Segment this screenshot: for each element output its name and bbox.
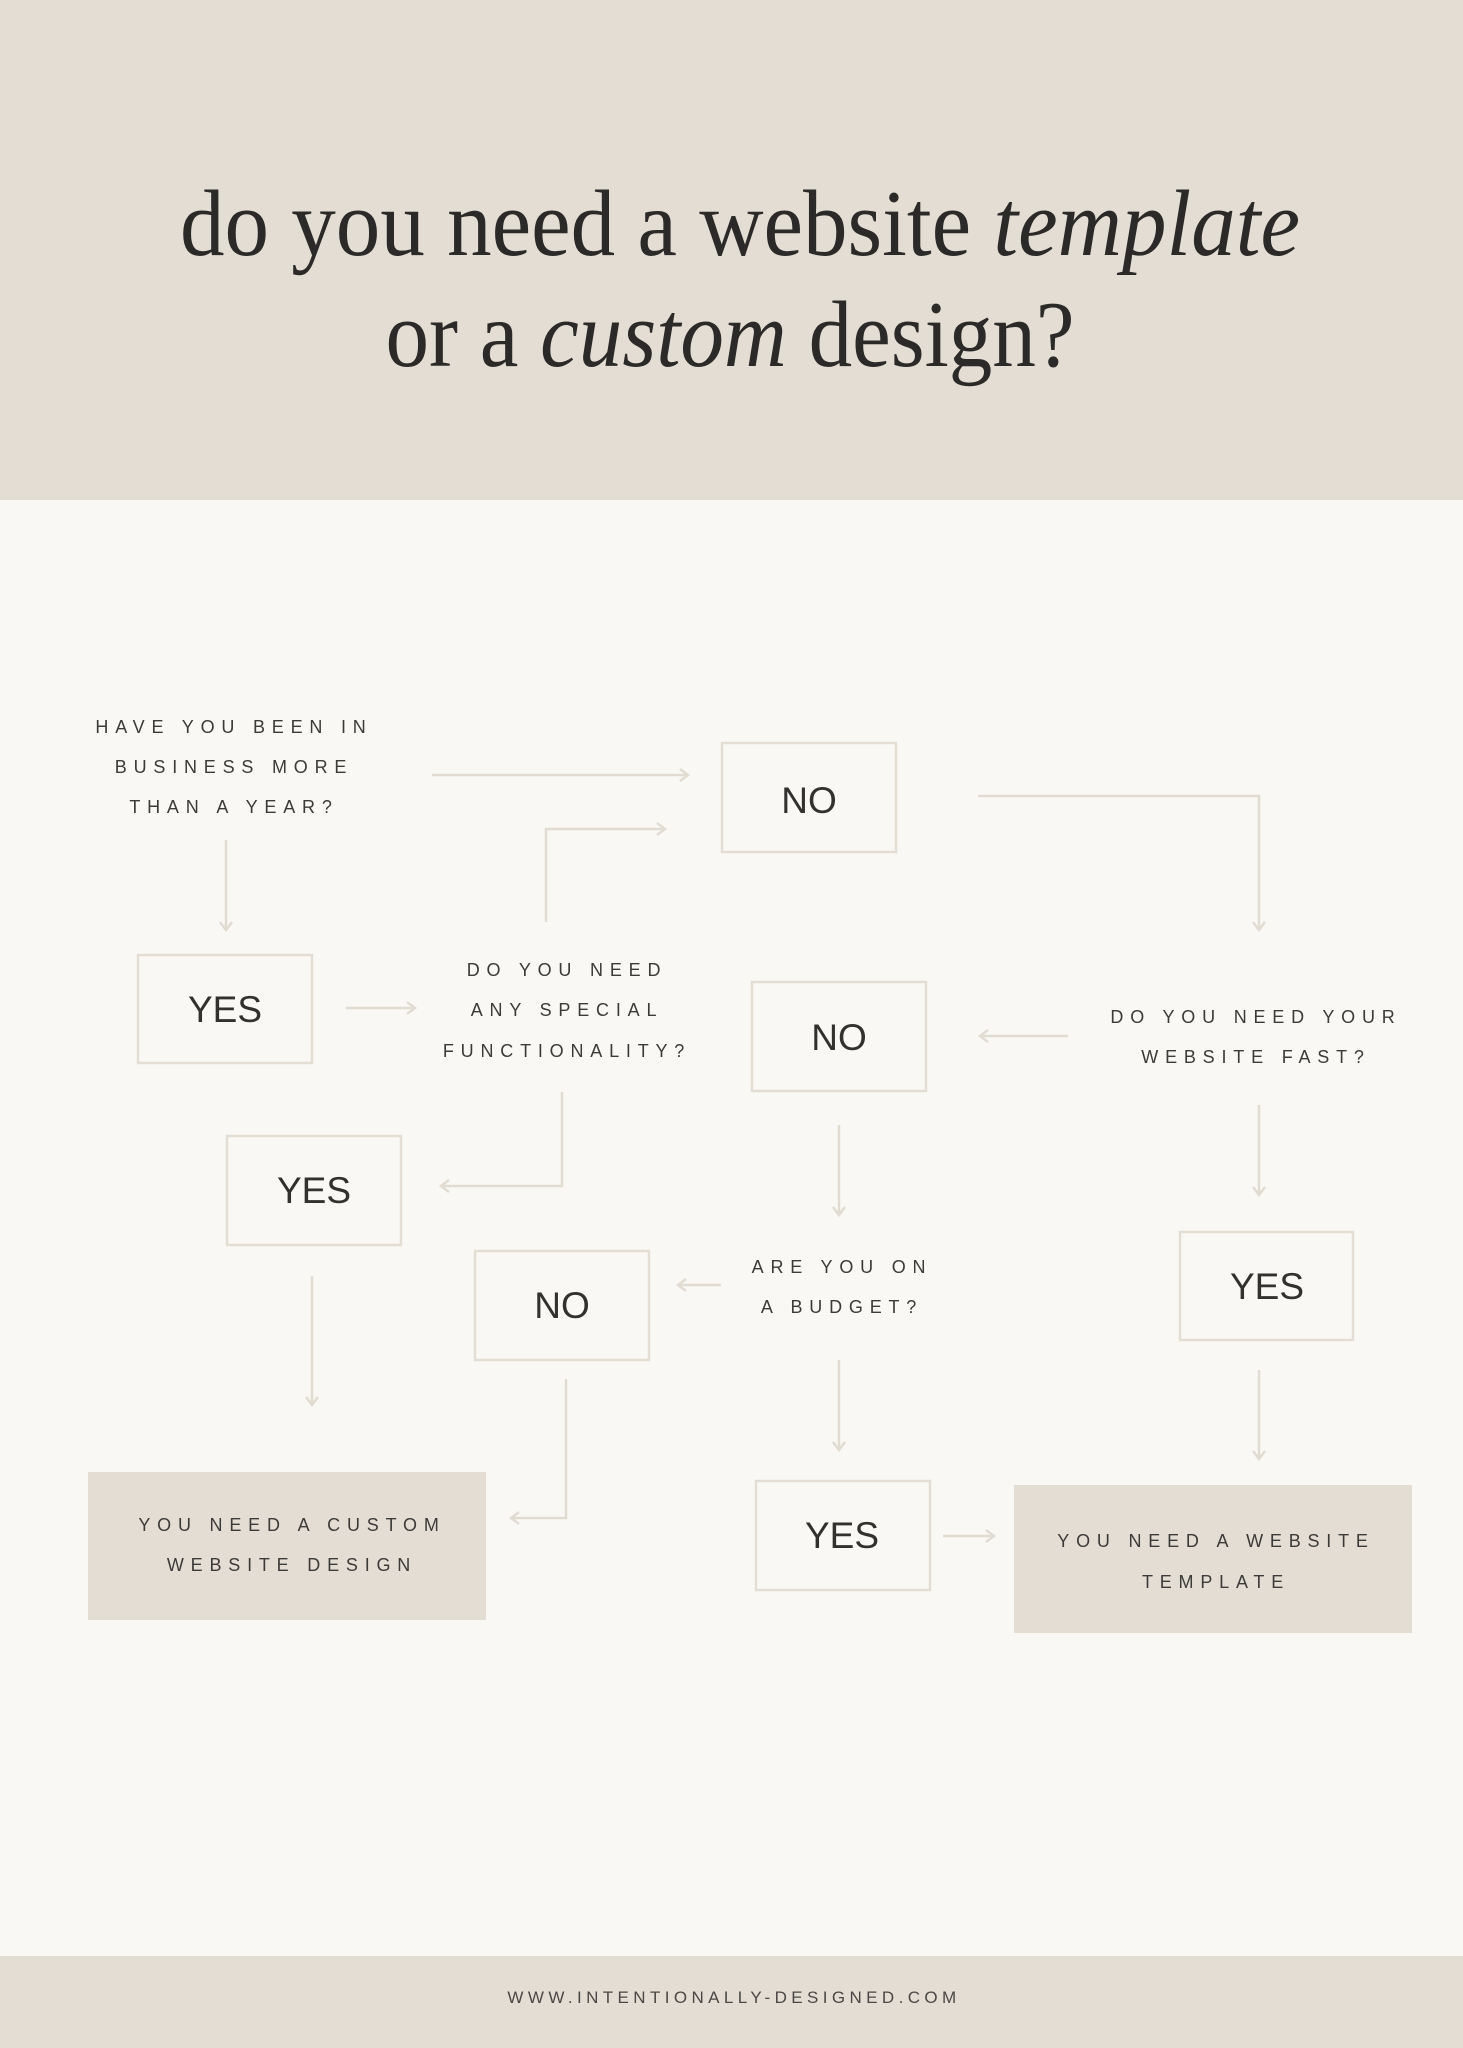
arrow: yes4 to template	[943, 1535, 994, 1537]
footer band	[0, 1956, 1463, 2048]
question: in business more than a year	[95, 717, 373, 817]
arrow: no2 down to budget	[838, 1125, 840, 1215]
box: yes 3: YES	[1230, 1266, 1304, 1307]
footer url: WWW.INTENTIONALLY-DESIGNED.COM	[507, 1988, 961, 2007]
title: do you need a website template	[180, 172, 1300, 276]
arrow: no1 to fast question	[978, 796, 1259, 930]
question: in business more than a year: HAVE YOU BEEN IN	[95, 717, 373, 737]
question: website fast	[1110, 1007, 1402, 1067]
box: no 3	[475, 1251, 649, 1360]
box: no 1: NO	[781, 780, 837, 821]
box: no 3: NO	[534, 1285, 590, 1326]
box: yes 3	[1180, 1232, 1353, 1340]
box: yes 1	[138, 955, 312, 1063]
header band	[0, 0, 1463, 500]
box: yes 2: YES	[277, 1170, 351, 1211]
question: special functionality: FUNCTIONALITY?	[443, 1041, 691, 1061]
question: special functionality	[443, 960, 691, 1061]
arrow: no3 to custom	[511, 1379, 566, 1518]
box: yes 4: YES	[805, 1515, 879, 1556]
box: no 1	[722, 743, 896, 852]
box: no 2: NO	[811, 1017, 867, 1058]
arrow: q2 down to yes2	[441, 1092, 562, 1186]
arrow: fast to no2	[980, 1035, 1068, 1037]
arrow: q1 down to yes	[225, 840, 227, 930]
question: special functionality: ANY SPECIAL	[471, 1000, 663, 1020]
arrow: yes1 to q2	[346, 1007, 415, 1009]
arrow: q2 up to no1	[546, 829, 665, 922]
question: special functionality: DO YOU NEED	[467, 960, 667, 980]
question: budget: ARE YOU ON	[752, 1257, 932, 1277]
result: website template: TEMPLATE	[1142, 1572, 1290, 1592]
question: in business more than a year: THAN A YEAR?	[129, 797, 339, 817]
arrow: budget to no3	[678, 1284, 721, 1286]
result: custom design: YOU NEED A CUSTOM	[138, 1515, 446, 1535]
arrow: q1 to no	[432, 774, 688, 776]
result: website template	[1014, 1485, 1412, 1633]
box: yes 1: YES	[188, 989, 262, 1030]
arrow: budget down to yes4	[838, 1360, 840, 1450]
question: website fast: DO YOU NEED YOUR	[1110, 1007, 1402, 1027]
arrow: fast down to yes3	[1258, 1105, 1260, 1195]
question: website fast: WEBSITE FAST?	[1141, 1047, 1371, 1067]
box: no 2	[752, 982, 926, 1091]
question: budget	[752, 1257, 932, 1317]
arrow: yes3 down to template	[1258, 1370, 1260, 1459]
box: yes 2	[227, 1136, 401, 1245]
result: custom design	[88, 1472, 486, 1620]
title	[180, 172, 1300, 387]
arrow: yes2 down to custom	[311, 1276, 313, 1405]
result: custom design: WEBSITE DESIGN	[167, 1555, 417, 1575]
title: or a custom design?	[386, 283, 1074, 387]
box: yes 4	[756, 1481, 930, 1590]
question: budget: A BUDGET?	[761, 1297, 923, 1317]
result: website template: YOU NEED A WEBSITE	[1057, 1531, 1375, 1551]
question: in business more than a year: BUSINESS MORE	[115, 757, 353, 777]
